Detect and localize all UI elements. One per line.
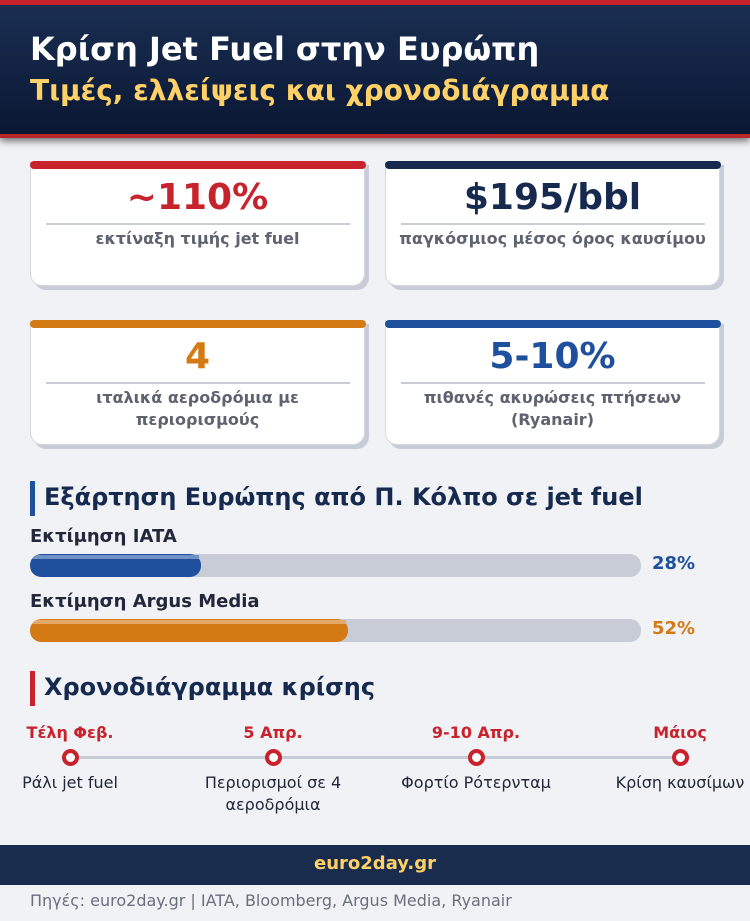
section heading: dependence: Εξάρτηση Ευρώπης από Π. Κόλπο σε jet fuel bbox=[44, 483, 643, 511]
stat: cancellations: 5-10% bbox=[489, 336, 616, 377]
event: jet fuel rally: Ράλι jet fuel bbox=[22, 773, 118, 792]
label: IATA estimate: Εκτίμηση IATA bbox=[30, 526, 177, 547]
label: Argus estimate: Εκτίμηση Argus Media bbox=[30, 591, 260, 612]
stat: price surge: ~110% bbox=[127, 177, 268, 218]
date: 9-10 April: 9-10 Απρ. bbox=[432, 723, 520, 742]
footer band bbox=[0, 845, 750, 885]
footer band: euro2day.gr bbox=[314, 853, 436, 874]
panel: italian airports card bbox=[30, 320, 365, 445]
section heading: timeline: Χρονοδιάγραμμα κρίσης bbox=[44, 673, 375, 701]
event: restrictions: Περιορισμοί σε 4 bbox=[205, 773, 341, 792]
event: Rotterdam cargo: Φορτίο Ρότερνταμ bbox=[401, 773, 551, 792]
sources: Πηγές: euro2day.gr | IATA, Bloomberg, Argus Media, Ryanair bbox=[30, 891, 512, 910]
timeline bbox=[22, 723, 744, 814]
bar chart: IATA 28% bbox=[30, 554, 641, 577]
marker bbox=[62, 749, 79, 766]
stat: global average: $195/bbl bbox=[464, 177, 641, 218]
panel: price surge card bbox=[30, 161, 365, 286]
marker bbox=[265, 749, 282, 766]
label: cancellations bbox=[424, 388, 681, 429]
date: end of February: Τέλη Φεβ. bbox=[27, 723, 113, 742]
bar chart: Argus 52% bbox=[30, 619, 641, 642]
date: May: Μάιος bbox=[653, 723, 707, 742]
panel: cancellations card bbox=[385, 320, 720, 445]
label: italian airports: περιορισμούς bbox=[136, 410, 259, 429]
panel: global average card bbox=[385, 161, 720, 286]
event: restrictions: αεροδρόμια bbox=[225, 795, 320, 814]
subtitle: Τιμές, ελλείψεις και χρονοδιάγραμμα bbox=[30, 74, 609, 107]
value: IATA 28%: 28% bbox=[652, 553, 695, 574]
event: fuel crisis: Κρίση καυσίμων bbox=[616, 773, 744, 792]
title: Κρίση Jet Fuel στην Ευρώπη bbox=[30, 30, 539, 68]
label: price surge: εκτίναξη τιμής jet fuel bbox=[96, 229, 299, 248]
date: 5 April: 5 Απρ. bbox=[243, 723, 303, 742]
label: italian airports bbox=[96, 388, 299, 429]
stat: italian airports: 4 bbox=[185, 336, 210, 377]
marker bbox=[672, 749, 689, 766]
label: italian airports: ιταλικά αεροδρόμια με bbox=[96, 388, 299, 407]
label: cancellations: πιθανές ακυρώσεις πτήσεων bbox=[424, 388, 681, 407]
marker bbox=[468, 749, 485, 766]
label: cancellations: (Ryanair) bbox=[511, 410, 594, 429]
header banner bbox=[0, 0, 750, 138]
event: restrictions bbox=[205, 773, 341, 814]
value: Argus 52%: 52% bbox=[652, 618, 695, 639]
label: global average: παγκόσμιος μέσος όρος καυσίμου bbox=[399, 229, 706, 248]
